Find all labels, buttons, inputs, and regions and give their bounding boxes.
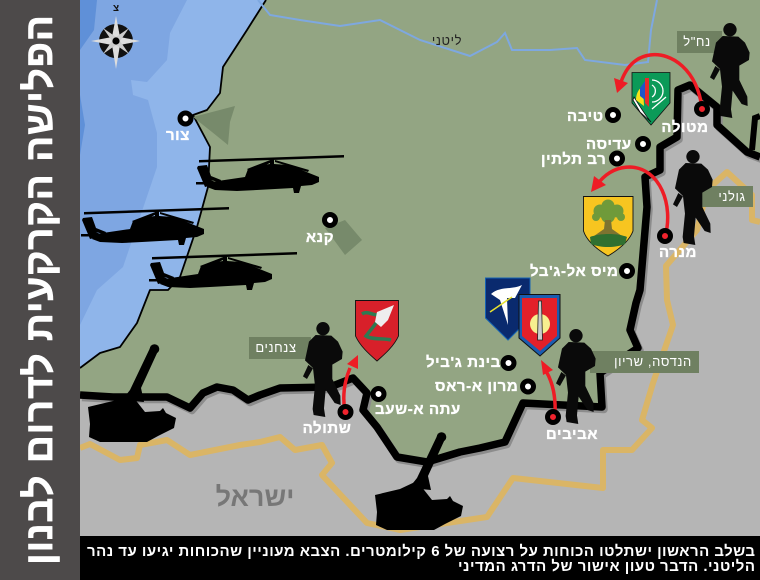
arrow: Metula xyxy=(614,55,702,108)
label: ישראל: ישראל xyxy=(216,482,294,512)
town: Shtula: שתולה xyxy=(303,420,351,437)
town: Avivim: אביבים xyxy=(546,426,598,443)
deep sea zone xyxy=(80,0,187,325)
town: Aita al-Shaab xyxy=(373,388,461,418)
town: Shtula xyxy=(303,406,351,437)
shield: Nahal xyxy=(632,72,670,125)
tag: Nahal: נח"ל xyxy=(683,34,711,49)
arrow: Avivim xyxy=(541,360,555,417)
town: Manara xyxy=(659,230,697,261)
title panel: הפלישה הקרקעית לדרום לבנון xyxy=(18,15,61,565)
tag: Golani: גולני xyxy=(718,189,746,204)
town: Tyre xyxy=(166,113,191,144)
Qana district xyxy=(325,220,362,255)
soldier: Nahal xyxy=(710,23,750,118)
artillery left xyxy=(88,344,176,442)
golden line xyxy=(80,172,760,530)
helicopter 1 xyxy=(196,155,344,193)
helicopter 3 xyxy=(149,252,297,290)
caption xyxy=(80,536,760,580)
town: Metula: מטולה xyxy=(661,119,709,136)
shield: Paratroopers xyxy=(356,300,398,361)
Israel land xyxy=(80,85,760,540)
shield: Golani xyxy=(584,196,633,256)
tag: Golani xyxy=(700,186,753,207)
tag: Nahal xyxy=(677,31,722,53)
river label: ליטני xyxy=(432,33,462,48)
town: Manara: מנרה xyxy=(659,244,697,261)
tag: Paratroopers xyxy=(249,337,311,359)
town: Qana: קנא xyxy=(306,229,334,246)
town: Tyre: צור xyxy=(166,127,190,144)
shield: Engineers and armor xyxy=(519,294,560,356)
shield: Division xyxy=(486,278,530,340)
border shadow xyxy=(82,88,760,464)
border line xyxy=(80,85,760,462)
north letter: צ xyxy=(113,3,119,14)
town: Bint Jbeil: בינת ג'ביל xyxy=(426,354,501,371)
town: Maroun al-Ras: מרון א-ראס xyxy=(435,378,518,395)
town: Adaisseh: עדיסה xyxy=(586,136,632,153)
coastline xyxy=(80,0,266,368)
town: Aita al-Shaab: עתה א-שעב xyxy=(375,401,461,418)
artillery center xyxy=(375,432,463,530)
arrow: Manara xyxy=(591,167,668,237)
soldier: Armor xyxy=(556,329,596,424)
tag: Engineers and armor: הנדסה, שריון xyxy=(614,354,692,369)
Golan border line xyxy=(752,116,760,150)
town: Rab Thalathin: רב תלתין xyxy=(541,151,606,168)
soldier: Golani xyxy=(673,150,713,245)
town: Mays al-Jabal: מיס אל-ג'בל xyxy=(530,263,618,280)
town: Taybeh: טיבה xyxy=(567,108,604,125)
town: Avivim xyxy=(546,412,598,443)
title panel xyxy=(0,0,80,580)
arrow: Shtula xyxy=(344,355,358,412)
tag: Engineers and armor xyxy=(590,351,699,373)
Tyre district xyxy=(193,106,235,145)
town: Qana xyxy=(306,214,336,246)
Litani river xyxy=(258,0,657,65)
caption: הליטני. הדבר טעון אישור של הדרג המדיני xyxy=(458,558,755,575)
tag: Paratroopers: צנחנים xyxy=(255,340,297,355)
town: Metula xyxy=(661,104,709,136)
helicopter 2 xyxy=(81,207,229,245)
deepest sea zone xyxy=(80,0,97,155)
compass xyxy=(91,16,140,69)
caption: בשלב הראשון ישתלטו הכוחות על רצועה של 6 קילומטרים. הצבא מעוניין שהכוחות יגיעו עד נהר xyxy=(87,543,755,560)
soldier: Paratroopers xyxy=(303,322,343,417)
